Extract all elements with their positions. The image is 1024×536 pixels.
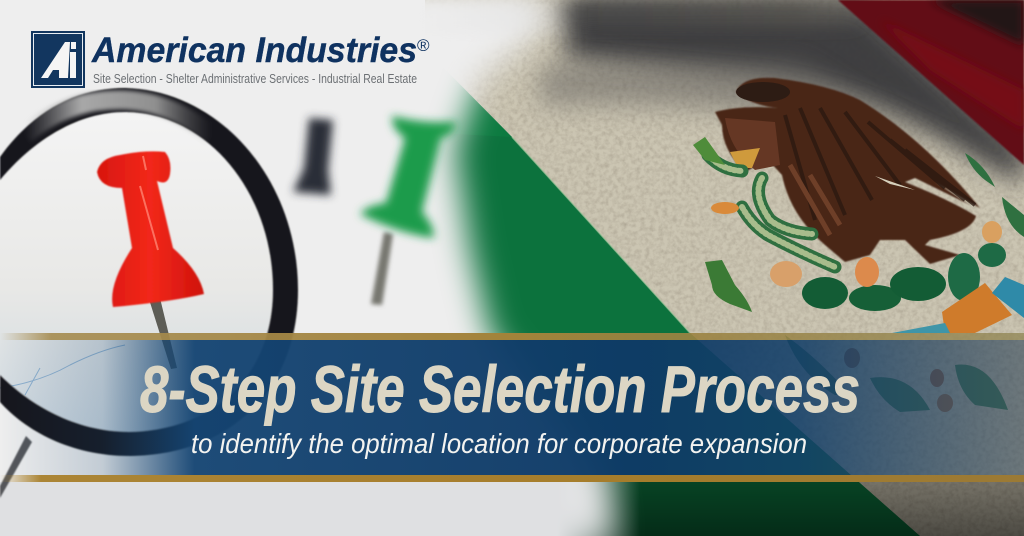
logo tagline: Site Selection - Shelter Administrative Services - Industrial Real Estate <box>93 72 417 86</box>
panel: blurred white map background fading into flag <box>0 0 640 536</box>
oak branch <box>705 260 752 312</box>
laurel branch <box>965 153 1024 237</box>
lower arms foliage <box>785 335 1008 412</box>
nopal pot and water <box>892 277 1024 333</box>
logo wordmark: American Industries <box>91 31 417 70</box>
flag red stripe <box>838 0 1024 165</box>
flag fold shadow <box>565 0 1024 185</box>
flag green stripe <box>380 0 920 536</box>
flag soft grey shading <box>540 65 930 150</box>
subtitle: to identify the optimal location for corporate expansion <box>191 428 807 459</box>
flag white stripe <box>380 0 1024 536</box>
map line in lens <box>0 345 125 395</box>
flag stripe edge highlight <box>512 137 690 333</box>
logo mark <box>31 31 85 88</box>
cactus <box>770 221 1006 311</box>
panel: Mexican flag photo background <box>380 0 1024 536</box>
magnifier ring <box>0 88 298 456</box>
icon: blurred black pushpin <box>293 118 333 195</box>
eagle coat of arms <box>693 78 1024 333</box>
top edge fade strip <box>415 0 575 34</box>
gold bottom rule <box>0 475 1024 482</box>
needle <box>148 294 177 369</box>
logo: American Industries <box>31 31 430 88</box>
snake <box>693 137 835 267</box>
magnifier handle <box>0 436 32 498</box>
panel: blue title banner <box>0 333 1024 482</box>
flag top shadow strip <box>540 0 860 26</box>
darkening at bottom of flag <box>560 478 1024 536</box>
registered mark: ® <box>417 36 430 55</box>
eagle <box>715 78 980 264</box>
lens interior <box>0 112 273 432</box>
red pushpin in lens <box>97 151 204 369</box>
gold top rule <box>0 333 1024 340</box>
grey lower table tone <box>0 482 640 536</box>
ring top highlight <box>25 100 212 135</box>
icon: magnifying glass <box>0 88 298 498</box>
icon: blurred green pushpin <box>360 116 456 305</box>
